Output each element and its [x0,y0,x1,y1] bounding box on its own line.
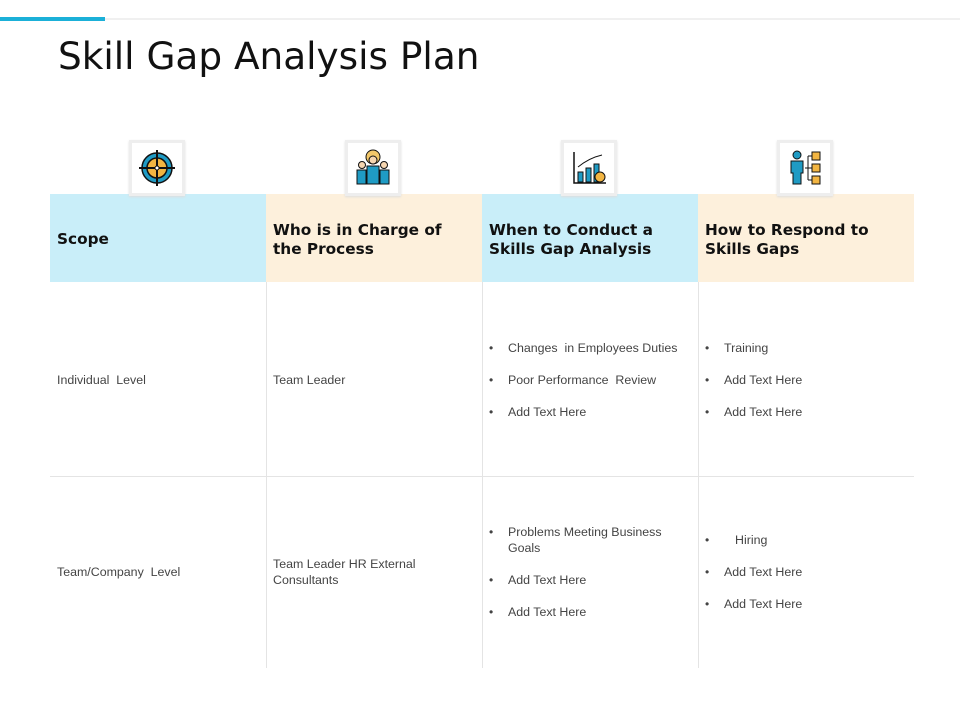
text: • [705,533,709,547]
text: Team Leader [273,373,345,387]
text: Goals [508,541,540,555]
text: • [489,605,493,619]
text: Add Text Here [508,605,586,619]
text: • [489,373,493,387]
text: • [705,597,709,611]
text: Team Leader HR External [273,557,416,571]
icon: chart [561,140,617,196]
text: Problems Meeting Business [508,525,662,539]
text: • [705,341,709,355]
text: Hiring [735,533,767,547]
row 1 text: Individual Level [57,373,146,387]
icon: hierarchy person [777,140,833,196]
text: Add Text Here [724,373,802,387]
header: how: How to Respond to [705,220,869,238]
text: Add Text Here [724,597,802,611]
text: Changes in Employees Duties [508,341,677,355]
header: how [698,194,914,282]
icon: target [129,140,185,196]
text: Add Text Here [508,405,586,419]
text: Training [724,341,768,355]
header: who is in charge [266,194,482,282]
text: • [489,573,493,587]
text: • [705,565,709,579]
icon: team [345,140,401,196]
row 2 text: Team/Company Level [57,565,180,579]
top accent bar [0,18,960,20]
header: how: Skills Gaps [705,240,799,258]
text: • [489,405,493,419]
text: • [705,373,709,387]
header: scope [50,194,266,282]
header: who is in charge: Who is in Charge of [273,220,442,238]
title: Skill Gap Analysis Plan [58,34,479,78]
grid lines [266,282,267,668]
header: scope: Scope [57,230,109,248]
text: Add Text Here [724,565,802,579]
header: who is in charge: the Process [273,240,374,258]
header: when: Skills Gap Analysis [489,240,651,258]
text: • [489,525,493,539]
text: Consultants [273,573,338,587]
text: • [705,405,709,419]
text: Add Text Here [724,405,802,419]
header: when [482,194,698,282]
text: Poor Performance Review [508,373,656,387]
text: • [489,341,493,355]
text: Add Text Here [508,573,586,587]
header: when: When to Conduct a [489,220,653,238]
